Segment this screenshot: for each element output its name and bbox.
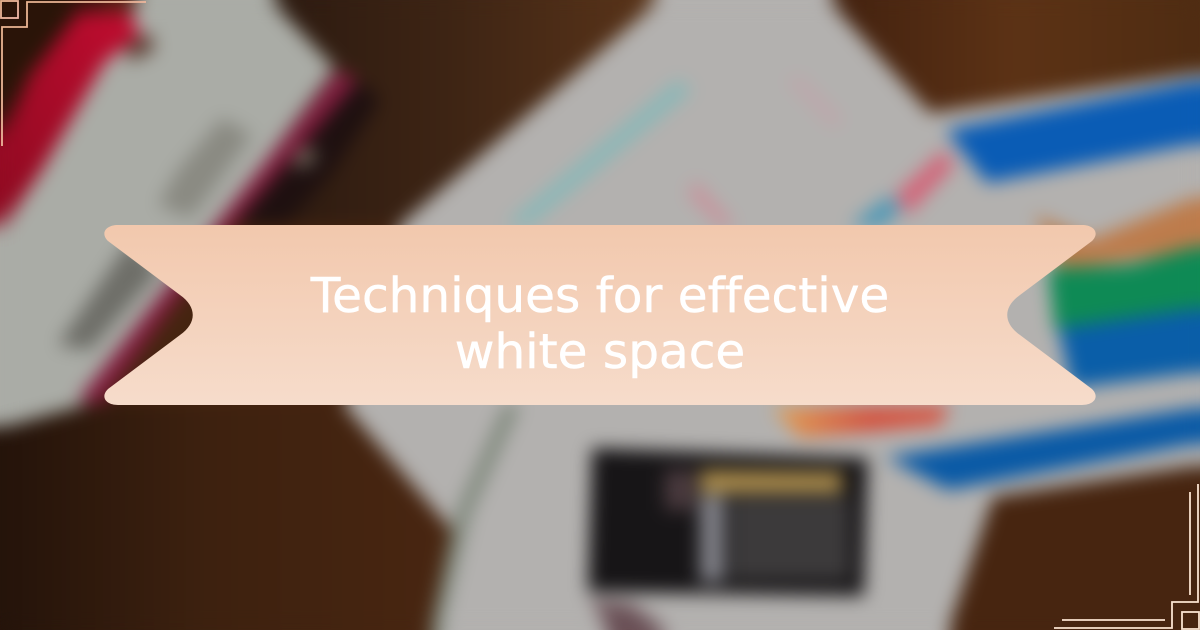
book (0, 0, 335, 428)
title: white space (455, 324, 745, 380)
phone (588, 448, 868, 596)
green line (430, 405, 520, 630)
paper (344, 0, 1200, 630)
lower blue band (886, 407, 1200, 490)
title: Techniques for effective (311, 268, 889, 324)
strips on paper (505, 80, 692, 225)
top-right blue band (946, 80, 1200, 183)
corner ornament: top left (1, 1, 146, 146)
corner ornament: bottom right (1054, 484, 1199, 629)
title (310, 268, 889, 380)
chart colours (1035, 195, 1200, 270)
ribbon banner (104, 225, 1096, 405)
